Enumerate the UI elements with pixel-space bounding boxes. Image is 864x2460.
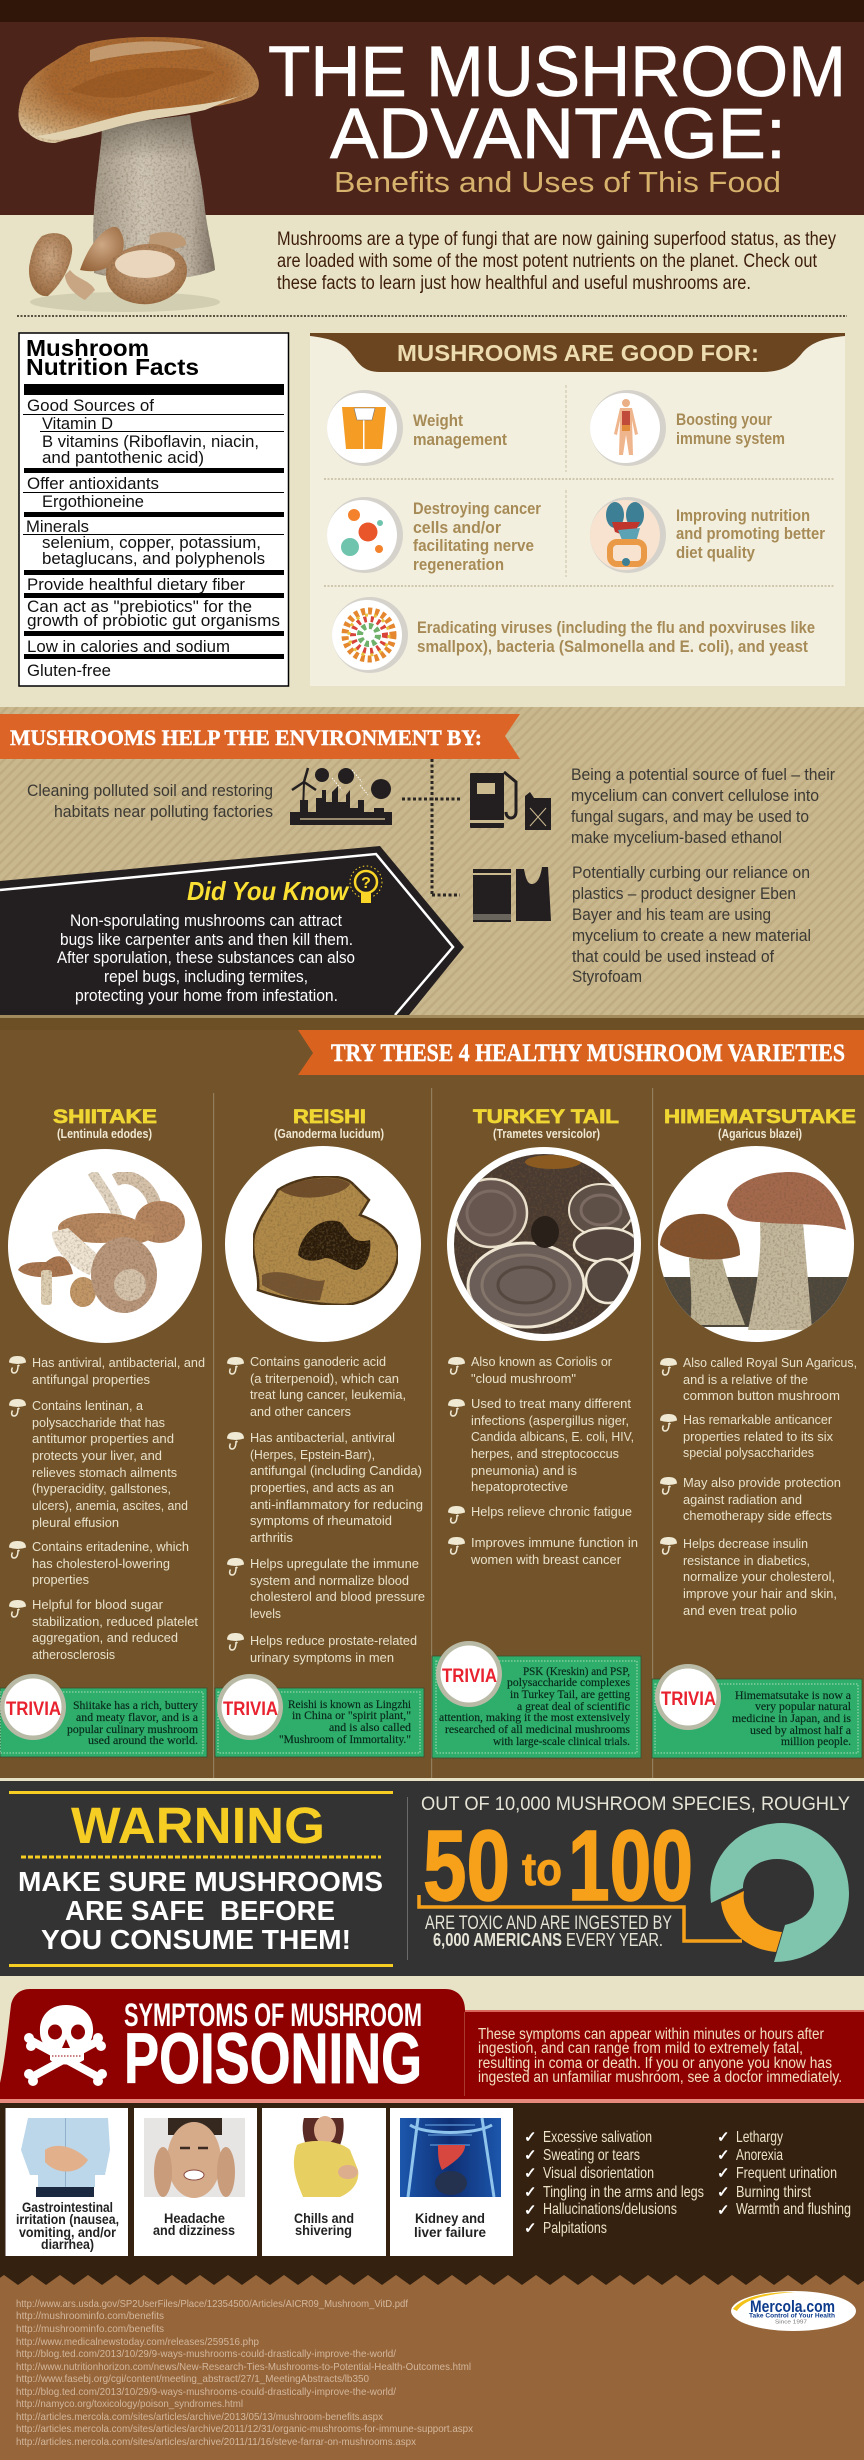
nutrition rows: Can act as "prebiotics" for the (27, 597, 252, 616)
statistic: toxic species: OUT OF 10,000 MUSHROOM SPECIES, ROUGHLY (421, 1794, 850, 1815)
intro paragraph: these facts to learn just how healthful and useful mushrooms are. (277, 273, 751, 294)
symptom checklist: Frequent urination (736, 2165, 837, 2182)
panel: poisoning symptoms header (0, 1989, 864, 2103)
list: shiitake benefits: has cholesterol-lowering (32, 1556, 170, 1571)
card: headache: and dizziness (153, 2222, 235, 2238)
latin names: (Trametes versicolor) (493, 1126, 600, 1141)
good-for labels: Weight (413, 412, 463, 430)
trivia: shiitake: popular culinary mushroom (67, 1722, 199, 1736)
card: chills: shivering (295, 2222, 352, 2238)
list: reishi benefits (227, 1354, 425, 1665)
list: reishi benefits: properties, and acts as an (250, 1480, 394, 1495)
symptom checklist: ✓ (524, 2184, 537, 2201)
panel: symptoms (0, 2103, 864, 2275)
symptom checklist: ✓ (717, 2184, 730, 2201)
card: kidney and liver (390, 2108, 513, 2256)
symptom checklist: ✓ (524, 2202, 537, 2219)
trivia: himematsutake: used by almost half a (750, 1723, 852, 1737)
text: fuel: mycelium can convert cellulose into (571, 786, 819, 805)
trivia: himematsutake: TRIVIA (661, 1689, 716, 1710)
icon: digestive organs (590, 497, 666, 573)
text: plastics: Styrofoam (572, 967, 642, 986)
poisoning paragraph (478, 2026, 842, 2086)
trivia: reishi: TRIVIA (223, 1699, 278, 1720)
logo: mercola: Since 1997 (775, 2320, 807, 2326)
good-for heading banner: MUSHROOMS ARE GOOD FOR: (397, 340, 759, 366)
icon: light bulb (350, 866, 382, 903)
trivia: turkey tail (432, 1641, 641, 1758)
list: turkey tail benefits: infections (aspergillus niger, (471, 1413, 629, 1428)
icon: bacteria (332, 597, 408, 673)
list: turkey tail benefits: Improves immune function in (471, 1535, 638, 1550)
good-for labels: Improving nutrition (676, 507, 810, 525)
list: shiitake benefits: polysaccharide that has (32, 1415, 165, 1430)
trivia: himematsutake: medicine in Japan, and is (732, 1711, 851, 1725)
list: himematsutake benefits: chemotherapy side effects (683, 1508, 832, 1523)
variety names: SHIITAKE (53, 1106, 157, 1128)
variety names: REISHI (293, 1106, 366, 1128)
symptom checklist: Sweating or tears (543, 2147, 640, 2164)
text: plastics: plastics – product designer Eben (572, 884, 796, 903)
list: himematsutake benefits: resistance in diabetics, (683, 1553, 810, 1568)
callout: did you know: Did You Know (187, 876, 350, 906)
list: reishi benefits: system and normalize blood (250, 1573, 409, 1588)
text: plastics (572, 863, 811, 986)
list: reishi benefits: symptoms of rheumatoid (250, 1513, 392, 1528)
nutrition rows: Gluten-free (27, 661, 111, 680)
statistic: toxic species: to (522, 1843, 562, 1895)
symptom checklist: ✓ (524, 2129, 537, 2146)
card: kidney and liver: liver failure (414, 2224, 486, 2240)
icon: cells (327, 497, 403, 573)
panel: nutrition facts (19, 333, 288, 686)
photo: turkey tail (447, 1147, 641, 1341)
symptom checklist: Tingling in the arms and legs (543, 2184, 704, 2201)
environment banner (0, 714, 520, 759)
source links: http://articles.mercola.com/sites/articles/archive/2013/05/13/mushroom-benefits.aspx (16, 2411, 384, 2423)
panel: mushroom varieties (0, 1015, 864, 1778)
source links: http://articles.mercola.com/sites/articles/archive/2011/11/16/steve-farrar-on-mushrooms.aspx (16, 2436, 417, 2448)
trivia: himematsutake (652, 1664, 862, 1758)
text: cleaning soil: Cleaning polluted soil and restoring (27, 781, 273, 800)
card: gastrointestinal: vomiting, and/or (19, 2224, 116, 2240)
nutrition rows: Vitamin D (42, 414, 113, 433)
nutrition rows: Low in calories and sodium (27, 637, 230, 656)
callout: did you know: Non-sporulating mushrooms can attract (70, 911, 342, 930)
trivia: himematsutake: very popular natural (755, 1699, 852, 1713)
source links: http://www.ars.usda.gov/SP2UserFiles/Place/12354500/Articles/AICR09_Mushroom_VitD.pdf (16, 2298, 408, 2310)
nutrition rows: Good Sources of (27, 396, 154, 415)
list: turkey tail benefits: herpes, and streptococcus (471, 1446, 619, 1461)
header band (0, 0, 864, 215)
nutrition heading: Nutrition Facts (26, 354, 199, 380)
title (268, 33, 846, 199)
list: turkey tail benefits: Helps relieve chronic fatigue (471, 1504, 632, 1519)
good-for labels: immune system (676, 430, 785, 448)
list: turkey tail benefits: women with breast cancer (470, 1552, 622, 1567)
card: gastrointestinal: Gastrointestinal (22, 2199, 113, 2215)
list: reishi benefits: Has antibacterial, antiviral (250, 1430, 395, 1445)
nutrition rows: selenium, copper, potassium, (42, 533, 261, 552)
symptom checklist: Palpitations (543, 2220, 607, 2237)
list: turkey tail benefits: hepatoprotective (471, 1479, 568, 1494)
warning message: WARNING (71, 1797, 325, 1854)
symptom checklist: ✓ (717, 2129, 730, 2146)
environment banner: MUSHROOMS HELP THE ENVIRONMENT BY: (10, 725, 482, 750)
list: shiitake benefits: (hyperacidity, gallstones, (32, 1481, 171, 1496)
trivia: turkey tail: a great deal of scientific (517, 1699, 630, 1713)
callout: did you know: repel bugs, including termites, (104, 967, 308, 986)
hero mushroom illustration (18, 37, 259, 312)
symptom checklist: Hallucinations/delusions (543, 2201, 677, 2218)
source links: http://articles.mercola.com/sites/articles/archive/2011/12/31/organic-mushrooms-for-immune-support.aspx (16, 2423, 474, 2435)
list: shiitake benefits: stabilization, reduced platelet (32, 1614, 198, 1629)
card: gastrointestinal: irritation (nausea, (16, 2211, 119, 2227)
logo: mercola: Mercola.com (750, 2297, 835, 2316)
latin names: (Lentinula edodes) (57, 1126, 152, 1141)
statistic: toxic species (419, 1794, 850, 1950)
list: turkey tail benefits: pneumonia) and is (471, 1463, 577, 1478)
good-for labels: and promoting better (676, 525, 826, 543)
list: reishi benefits: (a triterpenoid), which can (250, 1371, 399, 1386)
good-for labels: cells and/or (413, 519, 502, 537)
symptom checklist: ✓ (717, 2147, 730, 2164)
nutrition rows (26, 396, 280, 680)
symptom checklist: ✓ (717, 2165, 730, 2182)
list: shiitake benefits: antifungal properties (32, 1372, 150, 1387)
list: himematsutake benefits: common button mushroom (683, 1388, 840, 1403)
good-for labels: Boosting your (676, 411, 772, 429)
panel: sources footer (0, 2275, 864, 2460)
title: THE MUSHROOM (268, 33, 846, 112)
symptom checklist (524, 2129, 851, 2237)
warning message: YOU CONSUME THEM! (41, 1924, 351, 1955)
trivia: turkey tail: attention, making it the most extensively (439, 1710, 630, 1724)
source links: http://mushroominfo.com/benefits (16, 2310, 164, 2322)
list: shiitake benefits: ulcers), anemia, ascites, and (32, 1498, 188, 1513)
panel: mushrooms are good for (310, 333, 845, 686)
card: chills (262, 2108, 386, 2256)
list: reishi benefits: (Herpes, Epstein-Barr), (250, 1447, 375, 1462)
poisoning heading: POISONING (124, 2020, 422, 2099)
list: himematsutake benefits (660, 1355, 857, 1618)
list: himematsutake benefits: improve your hair and skin, (683, 1586, 837, 1601)
list: himematsutake benefits: and is a relative of the (683, 1372, 808, 1387)
dotted connectors (402, 759, 460, 895)
list: reishi benefits: Helps upregulate the immune (250, 1556, 419, 1571)
list: turkey tail benefits: Used to treat many different (471, 1396, 631, 1411)
statistic: toxic species: 50 (423, 1810, 510, 1922)
good-for labels: smallpox), bacteria (Salmonella and E. coli), and yeast (417, 638, 808, 656)
trivia: shiitake: used around the world. (88, 1733, 198, 1747)
card: chills: Chills and (294, 2210, 354, 2226)
poisoning paragraph: ingestion, and can range from mild to extremely fatal, (478, 2040, 803, 2057)
logo: mercola: Take Control of Your Health (749, 2314, 835, 2320)
list: turkey tail benefits: Candida albicans, E. coli, HIV, (471, 1429, 634, 1444)
list: reishi benefits: anti-inflammatory for reducing (250, 1497, 423, 1512)
icon: human body (590, 390, 666, 466)
symptom checklist: ✓ (524, 2165, 537, 2182)
source links: http://blog.ted.com/2013/10/29/9-ways-mushrooms-could-drastically-improve-the-world/ (16, 2348, 396, 2360)
symptom checklist: Lethargy (736, 2129, 783, 2146)
varieties banner (298, 1030, 864, 1075)
warning message: ARE SAFE BEFORE (65, 1895, 335, 1926)
title: ADVANTAGE: (330, 95, 786, 174)
list: reishi benefits: arthritis (250, 1530, 293, 1545)
source links: http://www.nutritionhorizon.com/news/New-Research-Ties-Mushrooms-to-Potential-Health-Outcomes.html (16, 2361, 471, 2373)
list: reishi benefits: levels (250, 1606, 281, 1621)
list: reishi benefits: cholesterol and blood pressure (250, 1589, 425, 1604)
trivia: turkey tail: researched of all medicinal mushrooms (445, 1722, 630, 1736)
nutrition rows: growth of probiotic gut organisms (27, 611, 280, 630)
photo: shiitake (8, 1149, 202, 1343)
list: turkey tail benefits: Also known as Coriolis or (471, 1354, 613, 1369)
source links: http://www.medicalnewstoday.com/releases/259516.php (16, 2336, 259, 2348)
text: fuel (571, 765, 835, 847)
good-for labels: diet quality (676, 544, 756, 562)
list: himematsutake benefits: against radiation and (683, 1492, 802, 1507)
card: kidney and liver: Kidney and (415, 2210, 485, 2226)
list: turkey tail benefits (448, 1354, 638, 1567)
latin names (57, 1126, 802, 1141)
trivia: turkey tail: TRIVIA (442, 1666, 497, 1687)
intro paragraph (277, 229, 836, 294)
icon: fuel pump (470, 772, 551, 830)
latin names: (Ganoderma lucidum) (274, 1126, 384, 1141)
symptom checklist: ✓ (524, 2147, 537, 2164)
variety names (53, 1106, 856, 1128)
trivia: reishi: in China or "spirit plant," (292, 1708, 411, 1722)
icon: weight scale (327, 390, 403, 466)
symptom checklist: Anorexia (736, 2147, 783, 2164)
statistic: toxic species: ARE TOXIC AND ARE INGESTED BY (425, 1913, 672, 1934)
photo: reishi (225, 1146, 421, 1342)
list: shiitake benefits: Helpful for blood sugar (32, 1597, 164, 1612)
callout: did you know (0, 846, 464, 1015)
text: plastics: Potentially curbing our reliance on (572, 863, 810, 882)
nutrition rows: Ergothioneine (42, 492, 144, 511)
list: himematsutake benefits: special polysaccharides (683, 1445, 814, 1460)
trivia: turkey tail: with large-scale clinical trials. (493, 1734, 630, 1748)
icon: skull and crossbones (24, 2005, 107, 2086)
list: shiitake benefits: protects your liver, and (32, 1448, 162, 1463)
list: shiitake benefits: Has antiviral, antibacterial, and (32, 1355, 205, 1370)
list: himematsutake benefits: Also called Royal Sun Agaricus, (683, 1355, 857, 1370)
list: reishi benefits: urinary symptoms in men (250, 1650, 394, 1665)
trivia: himematsutake: million people. (781, 1734, 851, 1748)
list: turkey tail benefits: "cloud mushroom" (471, 1371, 576, 1386)
list: himematsutake benefits: and even treat polio (683, 1603, 797, 1618)
good-for labels: facilitating nerve (413, 537, 534, 555)
donut chart (710, 1823, 849, 1962)
trivia: reishi (215, 1674, 424, 1757)
source links: http://mushroominfo.com/benefits (16, 2323, 164, 2335)
list: shiitake benefits: atherosclerosis (32, 1647, 115, 1662)
list: himematsutake benefits: Has remarkable anticancer (683, 1412, 833, 1427)
text: cleaning soil (27, 781, 273, 821)
list: himematsutake benefits: Helps decrease insulin (683, 1536, 808, 1551)
panel: warning (0, 1781, 864, 1976)
good-for labels (413, 411, 826, 656)
list: shiitake benefits (9, 1355, 205, 1662)
text: plastics: that could be used instead of (572, 947, 774, 966)
symptom checklist: ✓ (524, 2220, 537, 2237)
photo: himematsutake (658, 1146, 855, 1342)
list: shiitake benefits: antitumor properties and (32, 1431, 174, 1446)
warning message (9, 1791, 393, 1967)
good-for labels: regeneration (413, 556, 504, 574)
card: gastrointestinal (6, 2108, 128, 2256)
trivia: reishi: and is also called (329, 1720, 411, 1734)
list: shiitake benefits: relieves stomach ailments (32, 1465, 177, 1480)
title: Benefits and Uses of This Food (334, 167, 781, 199)
nutrition heading: Mushroom (26, 335, 149, 361)
list: reishi benefits: treat lung cancer, leukemia, (250, 1387, 406, 1402)
card: gastrointestinal: diarrhea) (41, 2236, 94, 2252)
nutrition rules (23, 384, 284, 659)
nutrition rows: Provide healthful dietary fiber (27, 575, 245, 594)
trivia: reishi: "Mushroom of Immortality." (279, 1732, 411, 1746)
statistic: toxic species: 6,000 AMERICANS EVERY YEAR. (433, 1930, 663, 1950)
nutrition rows: Minerals (26, 517, 89, 536)
list: shiitake benefits: pleural effusion (32, 1515, 119, 1530)
list: reishi benefits: Helps reduce prostate-related (250, 1633, 417, 1648)
symptom checklist: Burning thirst (736, 2184, 811, 2201)
variety names: TURKEY TAIL (473, 1106, 619, 1128)
poisoning heading: SYMPTOMS OF MUSHROOM (124, 1997, 422, 2033)
text: fuel: make mycelium-based ethanol (571, 828, 782, 847)
callout: did you know: After sporulation, these substances can also (57, 948, 355, 967)
symptom checklist: Excessive salivation (543, 2129, 652, 2146)
list: himematsutake benefits: properties related to its six (683, 1429, 833, 1444)
list: shiitake benefits: Contains eritadenine, which (32, 1539, 189, 1554)
good-for heading banner (310, 333, 845, 372)
text: plastics: mycelium to create a new material (572, 926, 811, 945)
card: headache (134, 2108, 257, 2256)
list: himematsutake benefits: normalize your cholesterol, (683, 1569, 835, 1584)
latin names: (Agaricus blazei) (718, 1126, 802, 1141)
trivia: turkey tail: polysaccharide complexes (507, 1675, 630, 1689)
statistic: toxic species: 100 (568, 1810, 693, 1922)
callout: did you know: protecting your home from infestation. (75, 986, 338, 1005)
card: headache: Headache (164, 2210, 225, 2226)
panel: environment (0, 707, 864, 1015)
text: fuel: Being a potential source of fuel – their (571, 765, 835, 784)
callout: did you know: bugs like carpenter ants and then kill them. (60, 930, 353, 949)
nutrition heading (26, 335, 199, 380)
source links: http://blog.ted.com/2013/10/29/9-ways-mushrooms-could-drastically-improve-the-world/ (16, 2386, 396, 2398)
list: shiitake benefits: aggregation, and reduced (32, 1630, 178, 1645)
trivia: turkey tail: PSK (Kreskin) and PSP, (523, 1664, 630, 1678)
good-for labels: management (413, 431, 507, 449)
list: reishi benefits: Contains ganoderic acid (250, 1354, 386, 1369)
text: cleaning soil: habitats near polluting factories (54, 802, 273, 821)
poisoning heading (124, 1997, 422, 2099)
trivia: shiitake: TRIVIA (6, 1699, 61, 1720)
good-for labels: Eradicating viruses (including the flu and poxviruses like (417, 619, 815, 637)
poisoning paragraph: resulting in coma or death. If you or anyone you know has (478, 2055, 832, 2072)
nutrition rows: betaglucans, and polyphenols (42, 549, 265, 568)
trivia: shiitake: Shiitake has a rich, buttery (73, 1698, 198, 1712)
symptom checklist: ✓ (717, 2202, 730, 2219)
good-for labels: Destroying cancer (413, 500, 542, 518)
list: shiitake benefits: Contains lentinan, a (32, 1398, 144, 1413)
trivia: himematsutake: Himematsutake is now a (735, 1688, 852, 1702)
nutrition rows: B vitamins (Riboflavin, niacin, (42, 432, 259, 451)
nutrition rows: Offer antioxidants (27, 474, 159, 493)
icon: plastic bags (473, 867, 551, 922)
icon: factory city (290, 768, 392, 825)
source links (16, 2298, 474, 2448)
trivia: shiitake: and meaty flavor, and is a (76, 1710, 199, 1724)
icon: light bulb: ? (361, 875, 371, 892)
text: plastics: Bayer and his team are using (572, 905, 771, 924)
source links: http://namyco.org/toxicology/poison_syndromes.html (16, 2398, 243, 2410)
nutrition rows: and pantothenic acid) (42, 448, 204, 467)
variety names: HIMEMATSUTAKE (664, 1106, 856, 1128)
list: reishi benefits: and other cancers (250, 1404, 351, 1419)
trivia: turkey tail: in Turkey Tail, are getting (510, 1687, 630, 1701)
symptom checklist: Visual disorientation (543, 2165, 654, 2182)
logo: mercola (731, 2291, 856, 2331)
text: fuel: fungal sugars, and may be used to (571, 807, 809, 826)
trivia: reishi: Reishi is known as Lingzhi (288, 1697, 412, 1711)
list: shiitake benefits: properties (32, 1572, 89, 1587)
warning message: MAKE SURE MUSHROOMS (18, 1866, 383, 1897)
list: reishi benefits: antifungal (including Candida) (250, 1463, 422, 1478)
source links: http://www.fasebj.org/cgi/content/meeting_abstract/27/1_MeetingAbstracts/lb350 (16, 2373, 369, 2385)
trivia: shiitake (0, 1674, 207, 1757)
list: himematsutake benefits: May also provide protection (683, 1475, 841, 1490)
